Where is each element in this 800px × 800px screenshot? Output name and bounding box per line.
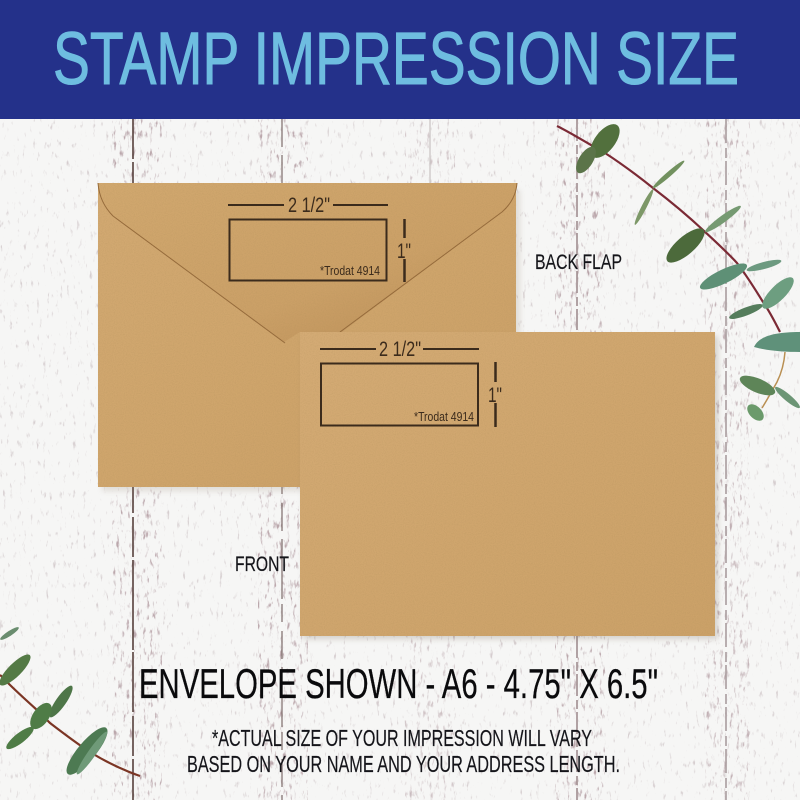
- leaves: [572, 119, 800, 424]
- flap: [98, 183, 517, 342]
- eucalyptus branch: top right: [557, 119, 800, 424]
- model note: *Trodat 4914: [414, 409, 474, 424]
- height dimension: [488, 362, 502, 427]
- disclaimer: BASED ON YOUR NAME AND YOUR ADDRESS LENGTH.: [187, 751, 620, 777]
- label: front: FRONT: [235, 553, 289, 576]
- width dimension: 2 1/2": [288, 194, 330, 217]
- impression box: [230, 220, 386, 280]
- impression box: [321, 364, 478, 426]
- height dimension: 1": [488, 384, 502, 407]
- label: back flap: BACK FLAP: [535, 251, 622, 274]
- title banner: [0, 0, 800, 119]
- width dimension: 2 1/2": [379, 338, 421, 361]
- leaves: [0, 625, 113, 780]
- envelope: front: [300, 332, 718, 639]
- envelope: back flap: [98, 183, 520, 491]
- eucalyptus branch: bottom left: [0, 625, 140, 780]
- height dimension: [397, 219, 411, 282]
- model note: *Trodat 4914: [320, 263, 380, 278]
- disclaimer: *ACTUAL SIZE OF YOUR IMPRESSION WILL VARY: [212, 725, 592, 751]
- disclaimer: [187, 725, 620, 777]
- height dimension: 1": [397, 240, 411, 263]
